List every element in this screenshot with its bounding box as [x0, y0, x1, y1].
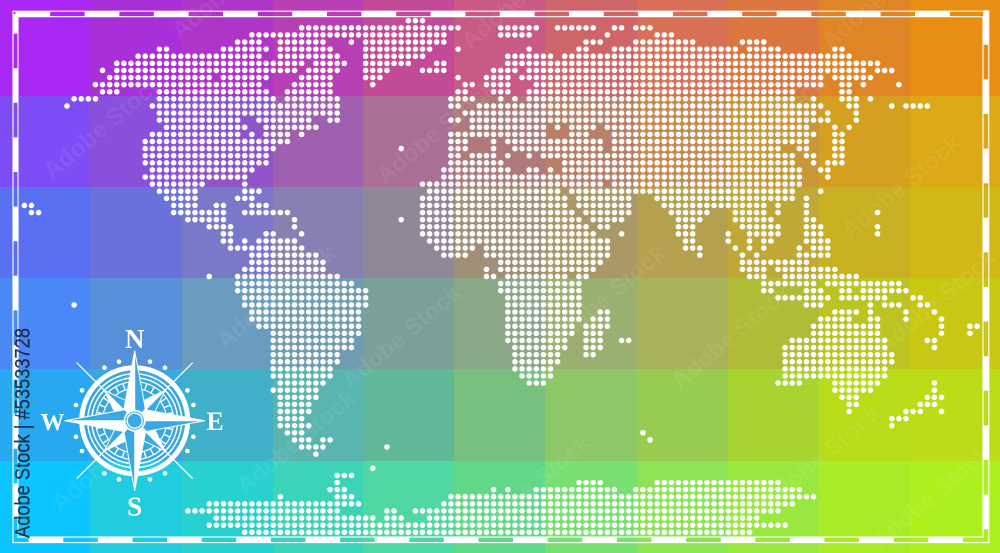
watermark: repeated Adobe Stock text: Adobe Stock — [837, 129, 967, 245]
compass: main star points — [65, 351, 205, 491]
Scattered islands — [24, 149, 878, 468]
watermark: repeated Adobe Stock text: Adobe Stock — [39, 69, 169, 185]
compass letter E: E — [206, 407, 224, 436]
South America — [231, 234, 366, 454]
watermark: repeated Adobe Stock text: Adobe Stock — [212, 239, 342, 355]
compass: rings — [82, 368, 188, 474]
watermark: repeated Adobe Stock text: Adobe Stock — [232, 384, 362, 500]
compass letter W: W — [40, 410, 64, 436]
watermark: repeated Adobe Stock text: Adobe Stock — [542, 239, 672, 355]
watermark: repeated Adobe Stock text: Adobe Stock — [337, 279, 467, 395]
Australia and Oceania — [778, 312, 977, 426]
watermark: repeated Adobe Stock text: Adobe Stock — [667, 279, 797, 395]
Antarctica — [188, 475, 814, 532]
watermark: repeated Adobe Stock text: Adobe Stock — [872, 244, 1000, 360]
Madagascar — [586, 312, 629, 355]
compass letter N: N — [125, 324, 145, 354]
watermark: repeated Adobe Stock text: Adobe Stock — [867, 439, 997, 553]
watermark: repeated Adobe Stock text: Adobe Stock — [757, 399, 887, 515]
compass: outer dots — [74, 359, 196, 482]
watermark: repeated Adobe Stock text: Adobe Stock — [702, 69, 832, 185]
Europe, Asia and Africa — [422, 28, 927, 383]
compass rose — [65, 351, 205, 491]
compass: diagonal lines — [77, 363, 193, 479]
watermark: repeated Adobe Stock text: Adobe Stock — [372, 74, 502, 190]
stock credit text: Adobe Stock | #53533728 — [11, 328, 34, 538]
watermark: repeated Adobe Stock text: Adobe Stock — [47, 401, 177, 517]
watermark: repeated Adobe Stock text: Adobe Stock — [467, 429, 597, 545]
compass: centre hub — [124, 410, 146, 432]
compass: diagonal star points — [96, 382, 174, 460]
compass letter S: S — [127, 492, 142, 522]
North America and Greenland — [67, 21, 458, 241]
